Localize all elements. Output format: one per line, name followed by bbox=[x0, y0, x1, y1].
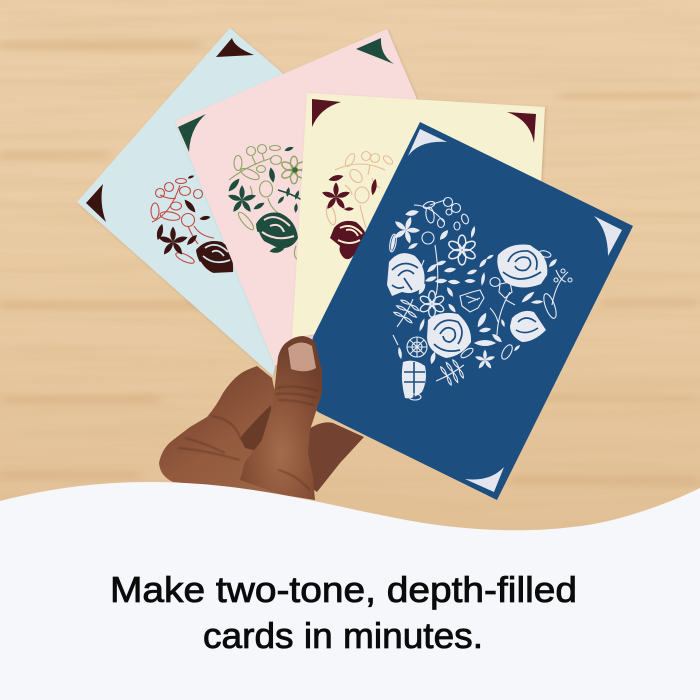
icon: navy card top corner bbox=[408, 129, 447, 156]
icon: pink card top corner bbox=[356, 38, 394, 64]
filled leaves and flowers bbox=[388, 209, 558, 398]
rose: top right bbox=[497, 244, 547, 288]
card: navy with white cut heart bbox=[300, 122, 633, 500]
card: pink with green cut heart bbox=[175, 29, 460, 366]
icon: cream card top right corner bbox=[507, 112, 536, 143]
heart pattern: pink card bbox=[226, 144, 308, 260]
hand: fist and thumb holding the cards bbox=[159, 336, 322, 500]
heart pattern: light blue card bbox=[151, 175, 233, 275]
background: wood table bbox=[0, 0, 700, 540]
rose: left bbox=[387, 253, 425, 296]
skin creases bbox=[178, 387, 318, 490]
rose: right bbox=[510, 311, 546, 342]
outlined botanical line work bbox=[387, 198, 572, 400]
white curved panel bbox=[0, 482, 700, 700]
icon: pink card left corner bbox=[178, 114, 206, 152]
heading text bbox=[110, 569, 577, 656]
hand: middle finger shadow bbox=[240, 405, 272, 455]
hand: curled index finger and palm bbox=[159, 366, 315, 500]
icon: cream card top left corner bbox=[312, 99, 341, 127]
heart pattern: navy card bbox=[387, 198, 572, 400]
card: light blue with red and dark cut heart bbox=[77, 28, 330, 376]
hand: thumb bbox=[240, 336, 322, 500]
icon: navy card right corner bbox=[594, 216, 622, 256]
card: cream with peach and maroon cut heart bbox=[292, 93, 545, 338]
icon: navy card bottom corner bbox=[465, 467, 504, 492]
heart pattern: cream card bbox=[321, 152, 394, 259]
icon: light blue card left corner bbox=[86, 184, 106, 222]
icon: light blue card top corner bbox=[216, 38, 254, 57]
icon: thumbnail bbox=[288, 342, 316, 371]
heading text: cards in minutes. bbox=[203, 615, 483, 656]
hand: back fingers bbox=[300, 422, 364, 492]
heading text: Make two-tone, depth-filled bbox=[110, 569, 577, 610]
rose: center bbox=[427, 313, 471, 358]
